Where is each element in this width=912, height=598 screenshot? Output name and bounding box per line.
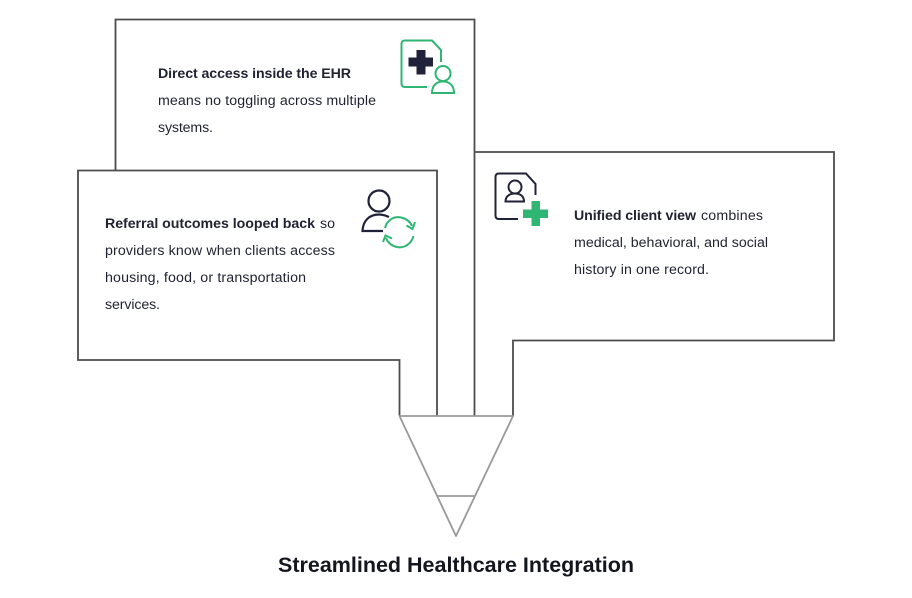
text: direct access <box>158 66 376 136</box>
panel: unified client view <box>474 152 834 416</box>
icon: person with refresh arrows <box>362 190 415 247</box>
text: referral outcomes <box>105 216 335 313</box>
text: direct access: means no toggling across multiple <box>158 93 376 109</box>
text: referral outcomes: housing, food, or transportation <box>105 270 306 286</box>
text: unified client view <box>574 208 768 278</box>
text: unified client view: medical, behavioral, and social <box>574 235 768 251</box>
text: referral outcomes: providers know when clients access <box>105 243 335 259</box>
text: unified client view: combines <box>701 208 763 224</box>
funnel <box>400 416 513 536</box>
text: direct access: Direct access inside the EHR <box>158 66 351 82</box>
text: referral outcomes: services. <box>105 297 160 313</box>
icon: medical document with person <box>402 40 454 93</box>
title: Streamlined Healthcare Integration <box>278 553 634 577</box>
icon: client document with plus <box>496 174 548 226</box>
text: referral outcomes: so <box>320 216 335 232</box>
panel: referral outcomes <box>78 170 437 416</box>
text: unified client view: history in one record. <box>574 262 709 278</box>
panel: direct access <box>116 20 474 416</box>
text: unified client view: Unified client view <box>574 208 697 224</box>
text: direct access: systems. <box>158 120 213 136</box>
text: referral outcomes: Referral outcomes looped back <box>105 216 315 232</box>
